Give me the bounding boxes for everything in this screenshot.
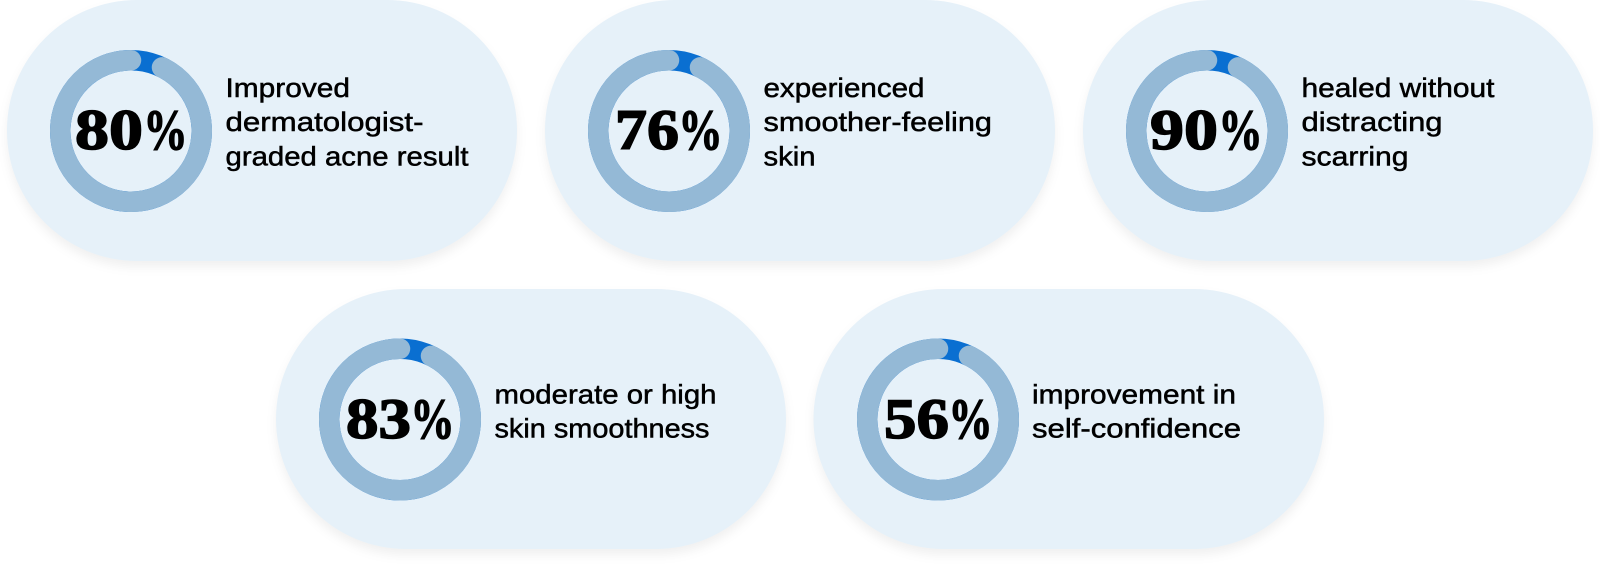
stat number: % [410, 388, 454, 451]
card background [7, 0, 517, 261]
stat label: healed without [1302, 73, 1495, 103]
stat label: Improved [226, 73, 350, 103]
stat number: 83 [346, 388, 411, 451]
stat label: scarring [1302, 142, 1408, 172]
donut ring 80% [60, 60, 202, 202]
stat number: % [144, 99, 188, 162]
stat number: 56 [884, 388, 949, 451]
stat label [494, 380, 716, 444]
stat label: skin smoothness [494, 414, 710, 444]
card background [545, 0, 1055, 261]
stat label [764, 73, 992, 172]
stat label: self-confidence [1032, 414, 1241, 444]
stat number: 90 [1150, 99, 1218, 162]
donut ring 83% [329, 349, 471, 490]
stat number: % [1218, 99, 1262, 162]
panel: 90% no scarring [1083, 0, 1593, 261]
stat number: 80 [75, 99, 143, 162]
stat label: experienced [764, 73, 924, 103]
stat number: % [678, 99, 722, 162]
stat label: moderate or high [494, 380, 716, 410]
panel: 76% smoother skin [545, 0, 1055, 261]
stat label: improvement in [1032, 380, 1236, 410]
stat label: dermatologist- [226, 107, 424, 137]
stat label: graded acne result [226, 142, 469, 172]
panel: 56% self-confidence [814, 289, 1324, 549]
stat number: % [948, 388, 992, 451]
stat label: skin [764, 142, 816, 172]
panel: 83% skin smoothness [276, 289, 786, 549]
stat number: 76 [615, 99, 679, 162]
stat label: distracting [1302, 107, 1442, 137]
donut ring 56% [867, 349, 1009, 490]
stat label [1032, 380, 1241, 444]
stat label [226, 73, 469, 172]
card background [1083, 0, 1593, 261]
donut ring 90% [1136, 60, 1278, 202]
stat label: smoother-feeling [764, 107, 992, 137]
donut ring 76% [598, 60, 740, 202]
card background [276, 289, 786, 549]
panel: 80% acne result [7, 0, 517, 261]
stat label [1302, 73, 1495, 172]
card background [814, 289, 1324, 549]
